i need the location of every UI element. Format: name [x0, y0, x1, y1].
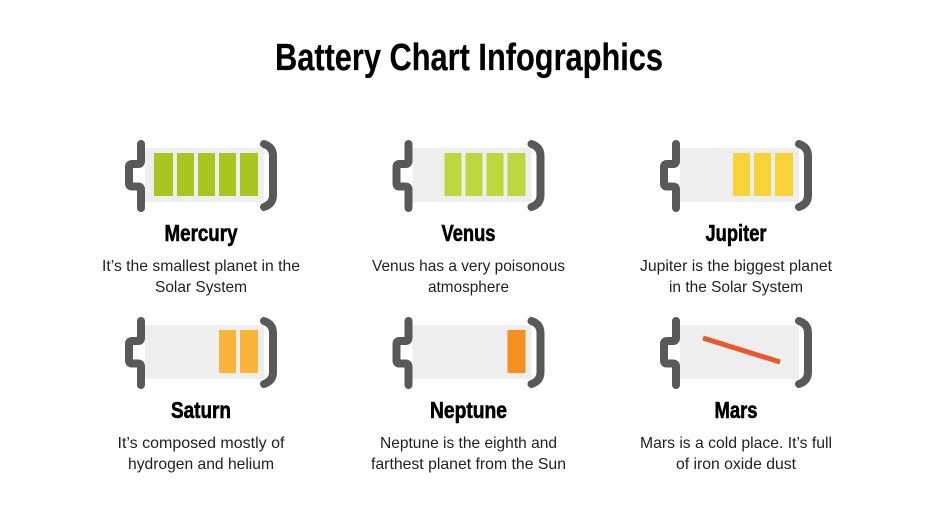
description: Saturn: hydrogen and helium — [128, 456, 274, 473]
description: Mars — [640, 435, 832, 473]
panel: Mars — [640, 321, 832, 473]
description: Venus — [372, 258, 565, 296]
battery: Mercury, five green cells — [129, 144, 273, 208]
heading: Jupiter: Jupiter — [706, 220, 767, 246]
battery: Saturn, two amber cells — [129, 321, 273, 385]
battery: Neptune, one orange cell — [396, 321, 540, 385]
panel: Venus — [372, 144, 565, 296]
heading: Neptune: Neptune — [430, 397, 507, 423]
battery: Mars, empty with red slash — [664, 321, 808, 385]
heading: Mars: Mars — [714, 397, 758, 423]
description: Saturn: It’s composed mostly of — [118, 435, 285, 452]
heading: Venus: Venus — [442, 220, 496, 246]
description: Jupiter: Jupiter is the biggest planet — [640, 258, 833, 275]
description: Mercury: It’s the smallest planet in the — [102, 258, 300, 275]
battery: Jupiter, three yellow cells — [664, 144, 808, 208]
description: Neptune: farthest planet from the Sun — [371, 456, 566, 473]
panel: Saturn — [118, 321, 285, 473]
heading: Mercury: Mercury — [164, 220, 238, 246]
description: Mercury — [102, 258, 300, 296]
description: Mercury: Solar System — [155, 279, 247, 296]
heading: Saturn: Saturn — [171, 397, 231, 423]
description: Venus: atmosphere — [428, 279, 509, 296]
description: Saturn — [118, 435, 285, 473]
description: Jupiter: in the Solar System — [669, 279, 803, 296]
panel: Jupiter — [640, 144, 833, 296]
description: Mars: of iron oxide dust — [676, 456, 797, 473]
description: Neptune: Neptune is the eighth and — [380, 435, 557, 452]
description: Jupiter — [640, 258, 833, 296]
panel: Neptune — [371, 321, 566, 473]
description: Neptune — [371, 435, 566, 473]
title: Battery Chart Infographics — [275, 37, 663, 79]
description: Mars: Mars is a cold place. It’s full — [640, 435, 832, 452]
description: Venus: Venus has a very poisonous — [372, 258, 565, 275]
battery: Venus, four light green cells — [396, 144, 540, 208]
panel: Mercury — [102, 144, 300, 296]
